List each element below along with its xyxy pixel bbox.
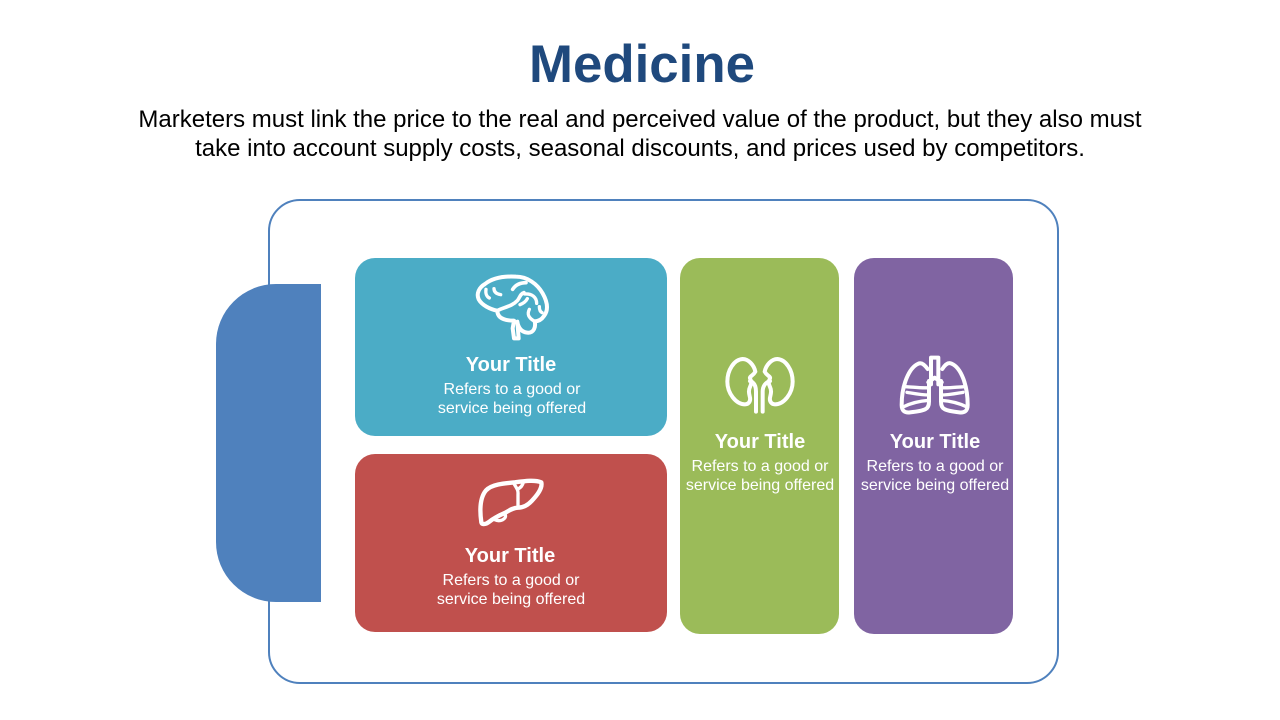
clipboard side tab	[216, 284, 321, 602]
panel: brain card	[355, 258, 667, 436]
description: service being offered	[861, 477, 1009, 494]
description: Refers to a good or	[444, 381, 580, 398]
panel: liver card	[355, 454, 667, 632]
clipboard outline panel	[268, 199, 1059, 684]
icon: brain	[476, 274, 549, 340]
description: service being offered	[438, 400, 586, 417]
intro text	[138, 106, 1142, 162]
heading: Your Title	[465, 545, 555, 567]
description	[437, 572, 585, 608]
description: Refers to a good or	[692, 458, 828, 475]
description	[686, 458, 834, 494]
description: service being offered	[437, 591, 585, 608]
description	[438, 381, 586, 417]
description: service being offered	[686, 477, 834, 494]
heading: Your Title	[715, 431, 805, 453]
icon: kidneys	[725, 357, 795, 414]
title: Medicine	[529, 35, 755, 94]
heading: Your Title	[466, 354, 556, 376]
description: Refers to a good or	[443, 572, 579, 589]
panel: kidney card	[680, 258, 839, 634]
icon: liver	[478, 478, 544, 526]
description: Refers to a good or	[867, 458, 1003, 475]
description	[861, 458, 1009, 494]
icon: lungs	[900, 356, 970, 414]
panel: lungs card	[854, 258, 1013, 634]
heading: Your Title	[890, 431, 980, 453]
intro text: take into account supply costs, seasonal discounts, and prices used by competitors.	[195, 135, 1085, 162]
intro text: Marketers must link the price to the real and perceived value of the product, but they also must	[138, 106, 1142, 133]
